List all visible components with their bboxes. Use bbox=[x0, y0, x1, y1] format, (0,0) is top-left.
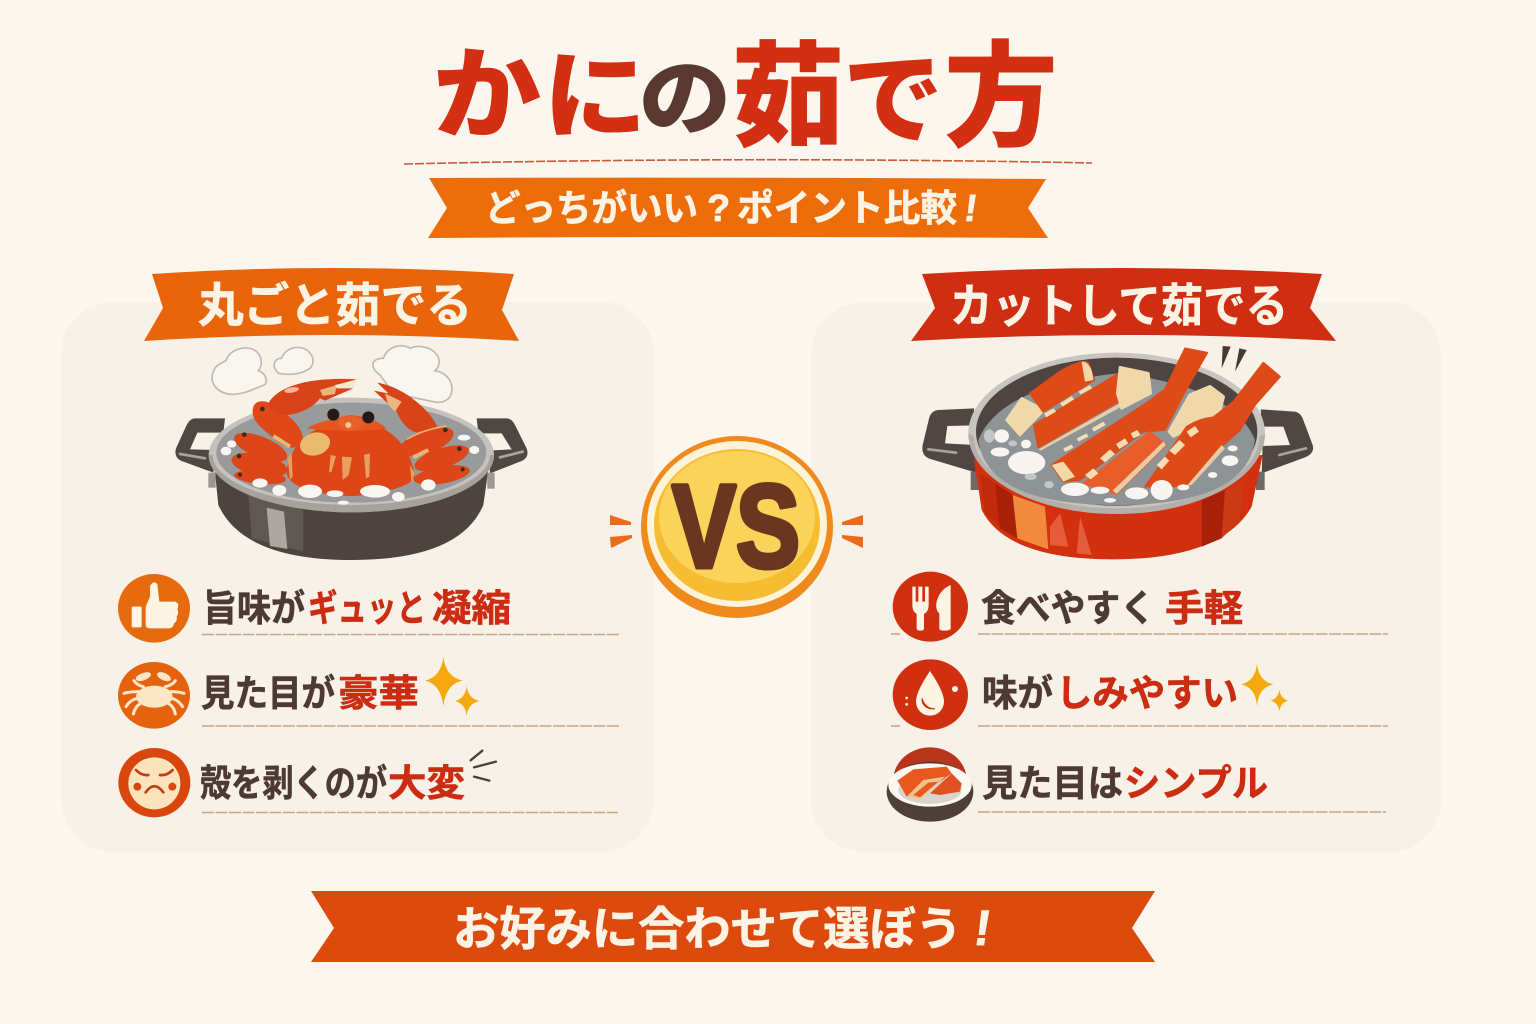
dark accent marks bbox=[1222, 346, 1231, 368]
crab leg 5 bbox=[1145, 363, 1280, 487]
title: 茹 bbox=[731, 35, 845, 162]
row: umami bbox=[203, 588, 511, 629]
title: の bbox=[639, 52, 731, 146]
heading: cut crab ribbon bbox=[911, 268, 1336, 341]
crab leg 3 long bbox=[1052, 348, 1207, 482]
row: easy to eat: 手軽 bbox=[1165, 588, 1243, 629]
row: simple: シンプル bbox=[1124, 763, 1268, 804]
bottom ribbon bbox=[311, 891, 1155, 962]
pot body bbox=[214, 463, 489, 560]
cream meat bbox=[1169, 387, 1223, 436]
heading: whole crab ribbon: 丸ごと茹でる bbox=[198, 279, 472, 332]
subtitle ribbon bbox=[428, 178, 1048, 238]
right list bbox=[887, 572, 1388, 822]
crab leg 4 short bbox=[1083, 432, 1166, 494]
bubbles bbox=[991, 429, 1238, 503]
subtitle ribbon: どっちがいい bbox=[485, 188, 698, 229]
row: umami: 凝縮 bbox=[432, 588, 511, 629]
crab joints bbox=[237, 407, 465, 477]
bubbles bbox=[221, 435, 479, 505]
VS badge: VS bbox=[672, 461, 800, 593]
crab leg 1 bbox=[1007, 398, 1044, 435]
row: simple bbox=[982, 763, 1268, 804]
illustration: whole crab in dark pot bbox=[175, 346, 527, 560]
row: looks: 見た目が bbox=[201, 673, 335, 714]
pot rim bbox=[968, 353, 1265, 514]
row: flavor: 味が bbox=[982, 673, 1053, 714]
VS badge bbox=[641, 436, 833, 618]
row: shell: 殻を剥くのが bbox=[200, 763, 387, 804]
icon: effort lines bbox=[471, 751, 496, 781]
title: で bbox=[843, 45, 943, 157]
pot rim bbox=[209, 398, 494, 512]
title bbox=[433, 35, 1058, 162]
row: shell: 大変 bbox=[388, 763, 465, 804]
subtitle ribbon: ? bbox=[707, 188, 730, 230]
crab claw arms bbox=[253, 401, 303, 448]
row: easy to eat: 食べやすく bbox=[981, 588, 1155, 629]
title: 方 bbox=[944, 35, 1058, 162]
icon: fork and knife bbox=[893, 572, 968, 642]
left list bbox=[118, 574, 620, 817]
panel: whole crab bbox=[61, 302, 654, 852]
row: simple: 見た目は bbox=[982, 763, 1123, 804]
heading: whole crab ribbon bbox=[144, 268, 519, 341]
icon: sparkle bbox=[425, 657, 479, 716]
water bbox=[978, 373, 1255, 505]
row: looks: 豪華 bbox=[338, 673, 419, 714]
title: か bbox=[433, 41, 541, 152]
icon: water drop bbox=[893, 659, 968, 730]
bottom ribbon: ! bbox=[971, 900, 995, 956]
handles bbox=[922, 408, 976, 473]
subtitle ribbon: ! bbox=[962, 187, 980, 230]
leg highlights bbox=[1044, 385, 1199, 479]
icon: plate of crab bbox=[887, 747, 973, 822]
icon: crab bbox=[118, 662, 190, 729]
title: に bbox=[543, 44, 647, 151]
icon: sparkle bbox=[1241, 663, 1288, 712]
illustration: cut crab legs in red pot bbox=[922, 346, 1313, 559]
icon: thumbs up bbox=[118, 574, 190, 643]
row: looks bbox=[201, 673, 419, 714]
row: flavor: しみやすい bbox=[1056, 673, 1238, 714]
pot body bbox=[974, 455, 1263, 559]
crab leg 2 bbox=[1034, 372, 1124, 447]
steam bbox=[212, 346, 452, 402]
bottom ribbon: お好みに合わせて選ぼう bbox=[453, 903, 962, 955]
crab legs bbox=[229, 421, 472, 488]
row: umami: ギュッと bbox=[308, 588, 426, 629]
row: umami: 旨味が bbox=[203, 588, 305, 629]
crab body bbox=[287, 419, 415, 496]
icon: tired face bbox=[118, 748, 190, 817]
crab eyes bbox=[327, 409, 339, 421]
subtitle ribbon: ポイント比較 bbox=[737, 188, 957, 229]
handles bbox=[175, 418, 225, 473]
panel: cut crab bbox=[811, 302, 1441, 852]
heading: cut crab ribbon: カットして茹でる bbox=[950, 280, 1288, 332]
VS side ticks bbox=[610, 515, 863, 548]
